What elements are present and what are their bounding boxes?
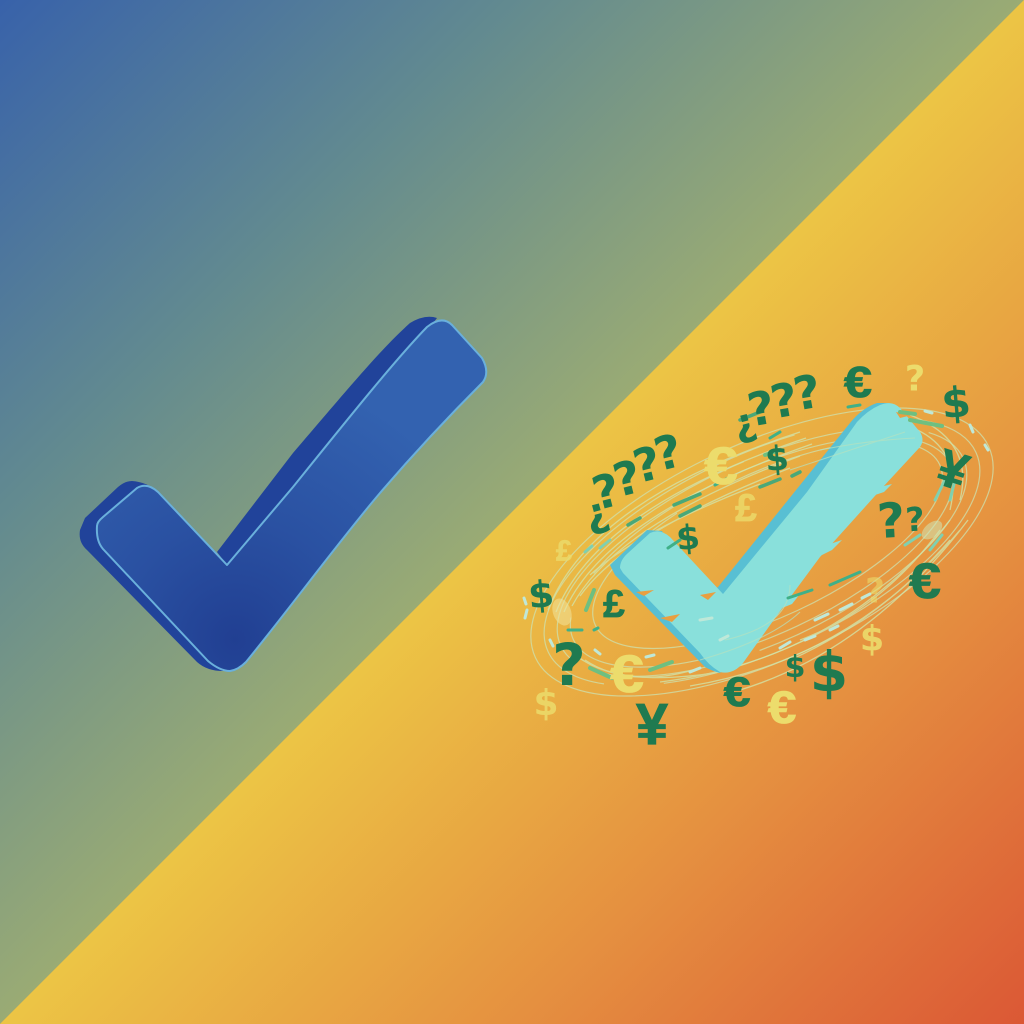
pale symbols bbox=[533, 360, 925, 733]
question cluster left bbox=[579, 423, 688, 539]
pale symbols: $ bbox=[860, 620, 884, 660]
dark symbols: ¥ bbox=[636, 692, 668, 757]
icon: solid blue check mark bbox=[80, 317, 486, 671]
dark symbols: ? bbox=[552, 631, 586, 699]
dark symbols: ¥ bbox=[930, 439, 975, 503]
chart: dense swirl bundles behind check bbox=[548, 415, 968, 690]
dark symbols: $ bbox=[810, 640, 848, 704]
pale symbols: £ bbox=[735, 487, 757, 530]
dark symbols: € bbox=[909, 553, 941, 609]
dark symbols: $ bbox=[526, 572, 556, 617]
dark symbols: $ bbox=[764, 438, 790, 480]
dark symbols: $ bbox=[785, 650, 805, 685]
dark symbols bbox=[526, 358, 975, 757]
icon: cyan brushed check mark bbox=[610, 403, 922, 673]
question cluster left: ? bbox=[608, 449, 647, 508]
pale symbols: ? bbox=[905, 360, 925, 400]
question pair right: ? bbox=[904, 499, 926, 539]
dark symbols: £ bbox=[603, 583, 625, 626]
brush jags on check edges bbox=[782, 484, 892, 608]
question cluster left: ? bbox=[649, 423, 688, 482]
dark symbols: € bbox=[724, 668, 750, 715]
pale symbols: € bbox=[704, 437, 738, 496]
dark symbols: € bbox=[844, 358, 872, 407]
question cluster left: ? bbox=[587, 462, 626, 521]
icon group: currency and question symbols bbox=[526, 358, 975, 757]
question cluster top: ? bbox=[743, 380, 779, 437]
question pair right bbox=[876, 493, 926, 550]
pale symbols: £ bbox=[556, 535, 572, 567]
question cluster top: ? bbox=[766, 372, 802, 429]
pale symbols: € bbox=[768, 683, 796, 733]
question cluster top bbox=[728, 364, 825, 447]
question cluster top: ¿ bbox=[728, 399, 761, 447]
chart: swirl lines behind check bbox=[490, 348, 1024, 756]
question cluster left: ? bbox=[628, 435, 667, 494]
pale symbols: $ bbox=[533, 683, 559, 724]
dark symbols: $ bbox=[675, 517, 702, 559]
pale symbols: ? bbox=[865, 571, 885, 611]
question pair right: ? bbox=[876, 493, 906, 550]
question cluster left: ¿ bbox=[579, 488, 614, 539]
question cluster top: ? bbox=[789, 364, 825, 421]
chart: swirl streaks and fragments bbox=[524, 405, 988, 678]
dark symbols: $ bbox=[939, 377, 973, 428]
pale symbols: € bbox=[610, 645, 644, 704]
